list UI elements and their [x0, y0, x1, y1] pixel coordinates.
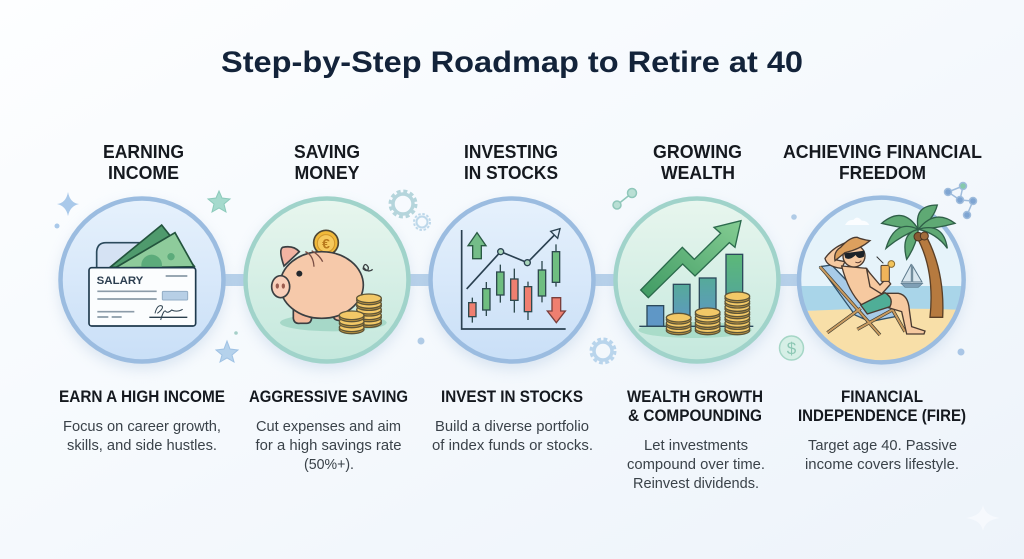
step 5: achieving financial freedom [783, 142, 982, 363]
chart: growth arrow, bars and coins [638, 221, 753, 338]
text: financial independence [798, 387, 966, 473]
icon: bottom gear [591, 339, 615, 363]
text: wealth growth and compounding: WEALTH GROWTH [627, 387, 763, 406]
text: financial independence: INDEPENDENCE (FIRE) [798, 406, 966, 425]
icon: large gear [390, 191, 416, 217]
icon: teal star [208, 191, 230, 212]
icon: link nodes [613, 188, 636, 209]
text: earn a high income [59, 387, 225, 454]
icon: network nodes [944, 182, 976, 218]
circle shadows [59, 203, 964, 369]
heading: earning income: EARNING [103, 142, 184, 162]
icon: piggy bank with coins [272, 230, 387, 334]
circle: investing in stocks [430, 198, 594, 362]
body text blocks [59, 387, 966, 492]
heading: achieving financial freedom [783, 142, 982, 183]
connector line between steps [222, 274, 801, 286]
text: wealth growth and compounding: & COMPOUNDING [628, 406, 762, 425]
icon: dollar coin [780, 336, 804, 360]
icon: dot lower right [958, 348, 964, 356]
text: financial independence: income covers lifestyle. [805, 456, 959, 473]
text: invest in stocks [432, 387, 593, 454]
heading: saving money: SAVING [294, 142, 360, 162]
step 1: earning income [60, 142, 224, 362]
step 4: growing wealth [616, 142, 778, 362]
heading: growing wealth: WEALTH [661, 163, 735, 183]
text: earn a high income: Focus on career growth, [63, 418, 221, 435]
palm leaves [882, 205, 955, 259]
text: wealth growth and compounding: Let investments [644, 437, 748, 454]
text: financial independence: Target age 40. Passive [808, 437, 957, 454]
heading: growing wealth: GROWING [653, 142, 742, 162]
heading: growing wealth [653, 142, 742, 183]
text: wealth growth and compounding: Reinvest dividends. [633, 475, 759, 492]
text: invest in stocks: Build a diverse portfolio [435, 418, 589, 435]
icon: blue star [216, 341, 238, 362]
icon: faint sparkle bottom right [966, 505, 1000, 531]
heading: achieving financial freedom: ACHIEVING FINANCIAL [783, 142, 982, 162]
circle: earning income [60, 198, 224, 362]
icon: beach scene circle [797, 197, 967, 363]
text: invest in stocks: INVEST IN STOCKS [441, 387, 583, 406]
icon: salary cheque with cash [89, 225, 196, 326]
text: wealth growth and compounding [627, 387, 765, 492]
icon: sparkle top left [57, 192, 79, 216]
title: Step-by-Step Roadmap to Retire at 40 [221, 46, 803, 79]
cocktail [877, 257, 895, 281]
heading: investing in stocks: INVESTING [464, 142, 558, 162]
heading: investing in stocks: IN STOCKS [464, 163, 558, 183]
text: aggressive saving [249, 387, 408, 473]
icon: dollar coin: $ [787, 339, 797, 358]
circle: saving money [246, 198, 408, 362]
icon: piggy bank with coins: € [322, 235, 330, 251]
icon: dot near beach [791, 214, 797, 220]
decorative icons [54, 182, 1000, 531]
step 2: saving money [246, 142, 408, 362]
beach chair [820, 265, 905, 335]
icon: dot left [54, 224, 60, 228]
icon: small gear [414, 214, 430, 230]
icon: small dot [234, 331, 238, 335]
chart: candlesticks [462, 229, 566, 329]
heading: saving money: MONEY [294, 163, 360, 183]
step 3: investing in stocks [430, 142, 594, 362]
text: earn a high income: skills, and side hustles. [67, 437, 217, 454]
text: aggressive saving: (50%+). [304, 456, 354, 473]
text: wealth growth and compounding: compound over time. [627, 456, 765, 473]
icon: salary cheque with cash: SALARY [97, 275, 144, 287]
text: invest in stocks: of index funds or stocks. [432, 437, 593, 454]
text: aggressive saving: AGGRESSIVE SAVING [249, 387, 408, 406]
reclining man [825, 237, 925, 334]
heading: earning income [103, 142, 184, 183]
text: aggressive saving: for a high savings rate [256, 437, 402, 454]
icon: bottom dot [418, 338, 424, 344]
circle: growing wealth [616, 198, 778, 362]
heading: investing in stocks [464, 142, 558, 183]
heading: achieving financial freedom: FREEDOM [839, 163, 926, 183]
text: earn a high income: EARN A HIGH INCOME [59, 387, 225, 406]
text: financial independence: FINANCIAL [841, 387, 923, 406]
text: aggressive saving: Cut expenses and aim [256, 418, 401, 435]
heading: saving money [294, 142, 360, 183]
heading: earning income: INCOME [108, 163, 179, 183]
